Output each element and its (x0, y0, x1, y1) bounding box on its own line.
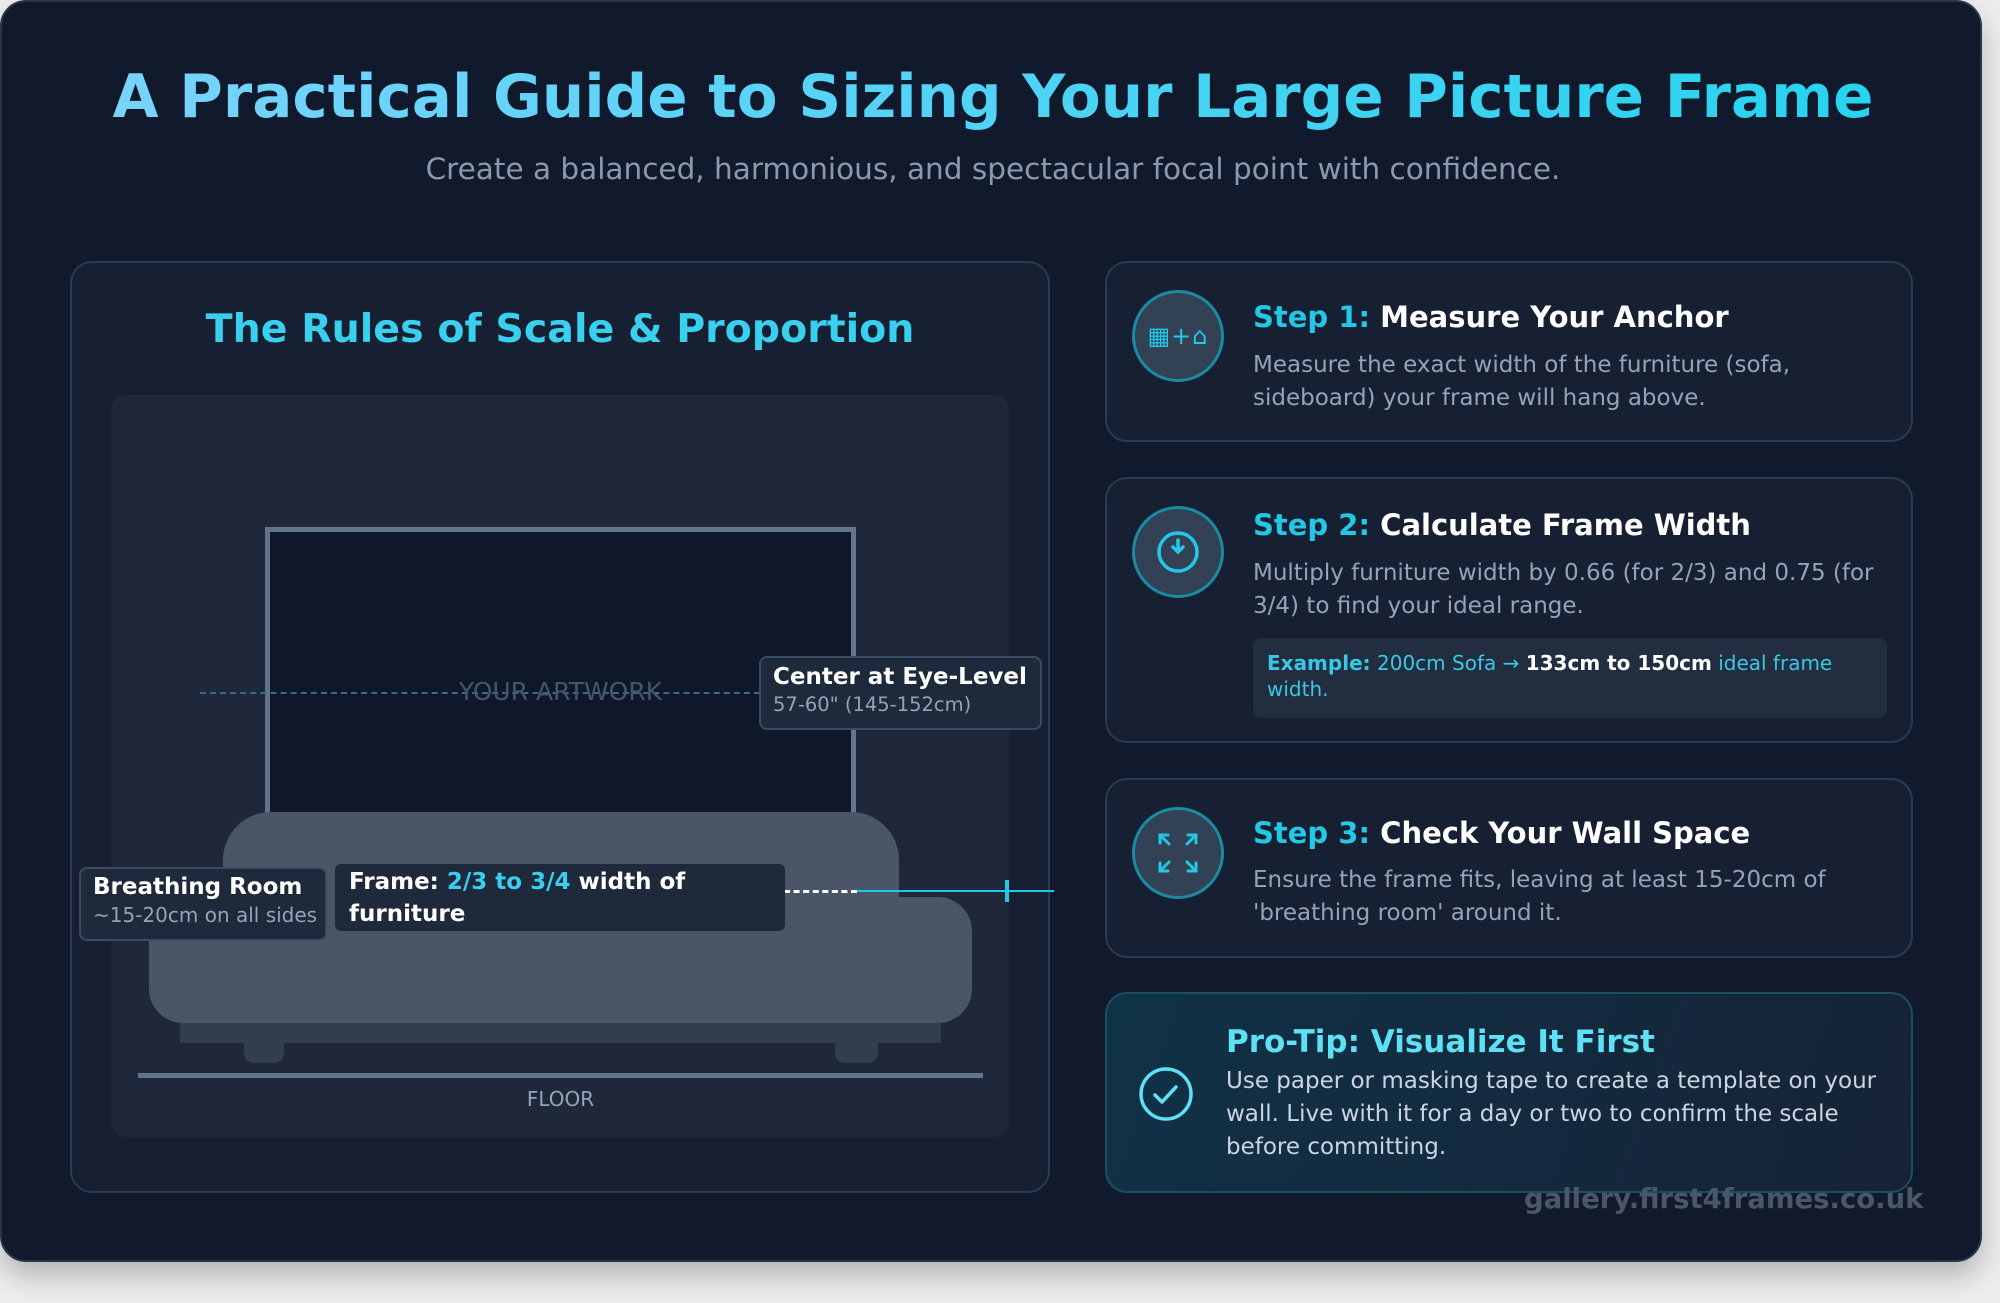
title: A Practical Guide to Sizing Your Large Picture Frame (113, 63, 1873, 132)
example box (1253, 638, 1887, 718)
step 2 text: Multiply furniture width by 0.66 (for 2/3) and 0.75 (for 3/4) to find your ideal range. (1253, 560, 1874, 619)
step 2 card (1105, 477, 1913, 743)
subtitle: Create a balanced, harmonious, and spectacular focal point with confidence. (426, 152, 1560, 186)
callout: eye level (759, 656, 1042, 730)
sofa seat (149, 897, 972, 1023)
artwork label: YOUR ARTWORK (459, 677, 662, 706)
panel heading: The Rules of Scale & Proportion (206, 306, 914, 352)
panel: rules of scale (70, 261, 1050, 1193)
step 2 title: Step 2: Calculate Frame Width (1253, 508, 1751, 542)
measurement line (785, 880, 1054, 902)
pro tip text: Use paper or masking tape to create a template on your wall. Live with it for a day or two to confirm the scale before committing. (1226, 1068, 1876, 1160)
callout: frame width (335, 864, 785, 931)
callout: breathing room: Breathing Room (93, 874, 302, 900)
step 3 card (1105, 778, 1913, 958)
step 1 text: Measure the exact width of the furniture (sofa, sideboard) your frame will hang above. (1253, 352, 1790, 411)
pro tip title: Pro-Tip: Visualize It First (1226, 1024, 1655, 1060)
step 3 text: Ensure the frame fits, leaving at least 15-20cm of 'breathing room' around it. (1253, 867, 1826, 926)
callout: breathing room (79, 867, 327, 941)
floor line (138, 1073, 983, 1078)
icon: measure (1132, 290, 1224, 382)
icon: check (1139, 1067, 1193, 1121)
step 3 title: Step 3: Check Your Wall Space (1253, 816, 1750, 850)
example box: Example: 200cm Sofa → 133cm to 150cm ideal frame width. (1267, 651, 1832, 701)
sofa base (180, 1023, 941, 1043)
step 1 title: Step 1: Measure Your Anchor (1253, 300, 1729, 334)
illustration (138, 527, 983, 1111)
callout: frame width: Frame: 2/3 to 3/4 width of furniture (349, 869, 685, 927)
artwork frame (265, 527, 856, 827)
floor label: FLOOR (527, 1087, 594, 1111)
callout: eye level: 57-60" (145-152cm) (773, 693, 971, 716)
step 1 card (1105, 261, 1913, 442)
pro tip card (1105, 992, 1913, 1193)
icon: clock (1132, 506, 1224, 598)
icon: measure: ▦+⌂ (1147, 322, 1209, 350)
eye level dashed line (200, 692, 760, 694)
sofa feet (244, 1043, 284, 1063)
scene (111, 395, 1009, 1137)
callout: breathing room: ~15-20cm on all sides (93, 903, 317, 927)
watermark: gallery.first4frames.co.uk (1524, 1183, 1923, 1215)
icon: expand (1132, 807, 1224, 899)
sofa back (223, 812, 899, 932)
callout: eye level: Center at Eye-Level (773, 664, 1027, 690)
